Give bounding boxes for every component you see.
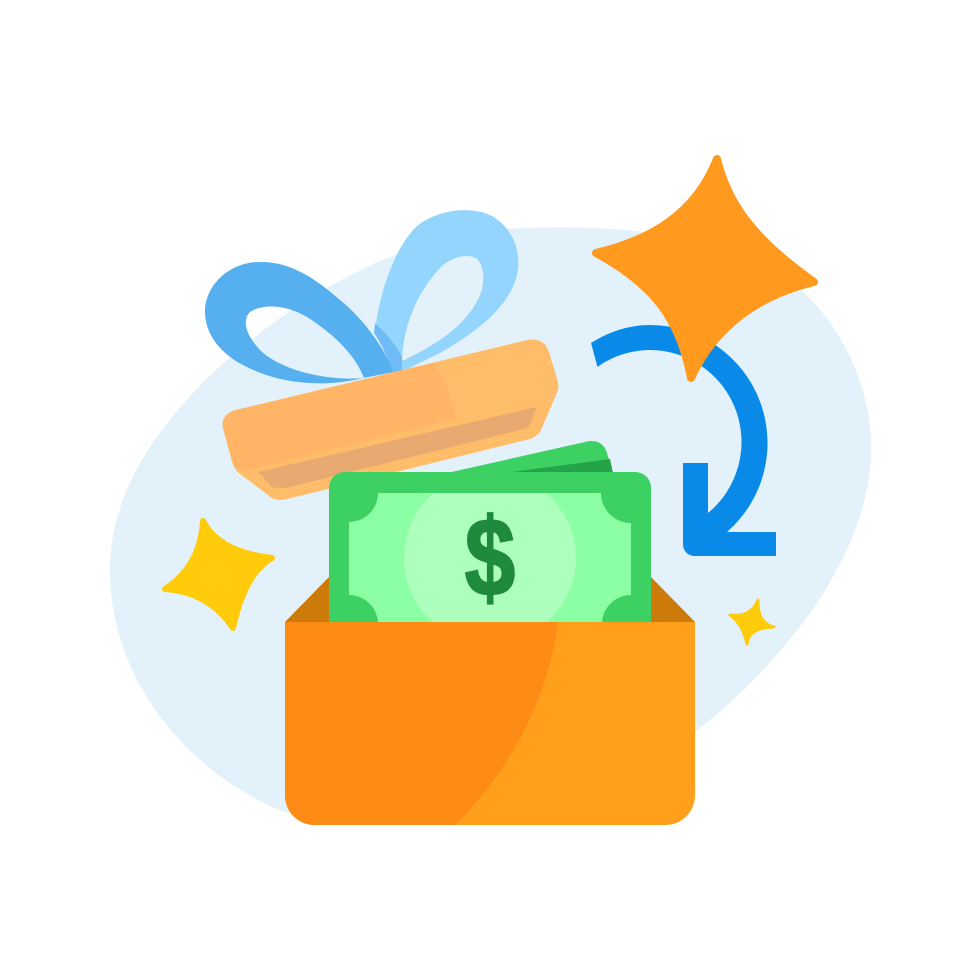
curved blue arrow bbox=[591, 325, 776, 556]
lid shaded left side bbox=[223, 363, 456, 471]
yellow sparkle right bbox=[730, 600, 774, 644]
wallet inner right flap bbox=[651, 577, 695, 622]
note frame bbox=[329, 472, 651, 622]
yellow sparkle left bbox=[165, 521, 272, 628]
back banknote shadow bbox=[512, 459, 613, 473]
gift ribbon bow bbox=[205, 210, 518, 383]
wallet shaded side bbox=[285, 622, 558, 825]
arrow arc bbox=[591, 325, 768, 532]
dollar sign: $ bbox=[465, 497, 515, 620]
note center medallion bbox=[349, 493, 631, 622]
illustration: cash gift box with reward arrow bbox=[110, 155, 871, 825]
background blob bbox=[110, 227, 871, 813]
arrow head bbox=[683, 463, 776, 556]
back banknote bbox=[447, 441, 613, 473]
large orange sparkle bbox=[596, 159, 814, 378]
wallet inner left flap bbox=[285, 577, 329, 622]
lid body bbox=[223, 340, 558, 500]
gift box lid bbox=[223, 340, 558, 500]
ribbon: left loop bbox=[205, 262, 394, 383]
ribbon: right loop bbox=[375, 210, 518, 371]
lid inner shadow strip bbox=[258, 407, 537, 488]
wallet body bbox=[285, 622, 695, 825]
note light face bbox=[349, 493, 631, 622]
front banknote bbox=[329, 472, 651, 622]
wallet envelope bbox=[285, 577, 695, 825]
ribbon: overlap knot bbox=[374, 323, 402, 372]
